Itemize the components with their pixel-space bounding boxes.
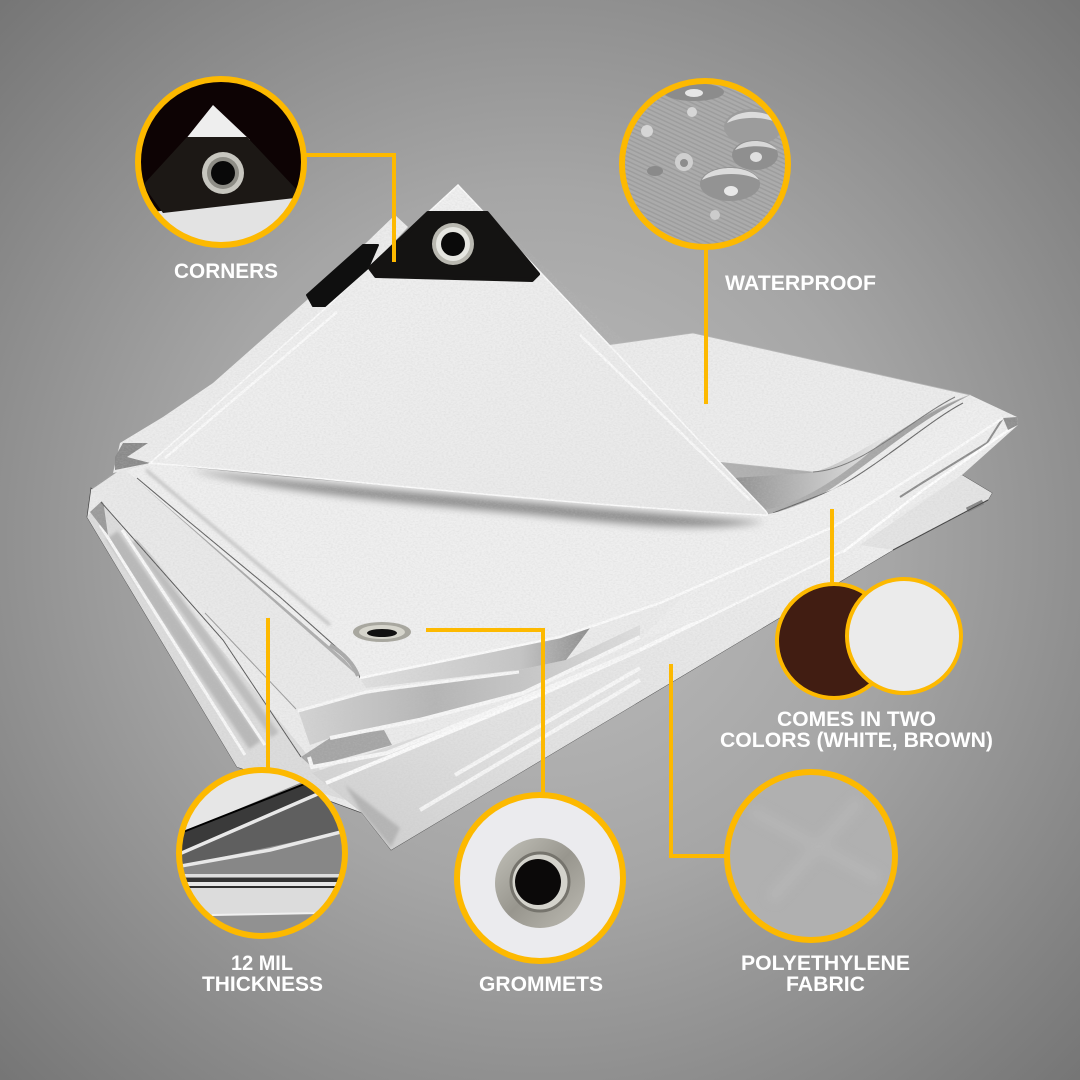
- label: polyethylene fabric: [741, 952, 910, 996]
- connector: thickness: [266, 618, 270, 768]
- folded triangle flap: [150, 185, 767, 515]
- label: two colors: COMES IN TWO: [777, 708, 936, 731]
- back corner black strip: [307, 245, 378, 306]
- swatch: white: [847, 579, 961, 693]
- right fold grooves: [773, 397, 1018, 552]
- front fold bands: [298, 625, 640, 767]
- circle: waterproof: [619, 78, 791, 250]
- label: thickness: THICKNESS: [202, 973, 323, 996]
- main top sheet: [125, 400, 1003, 678]
- wedge under fold: [733, 432, 893, 510]
- connector: grommets: [426, 630, 543, 793]
- label: corners: CORNERS: [174, 260, 278, 283]
- label: thickness: 12 MIL: [231, 952, 293, 975]
- connector: waterproof: [704, 247, 708, 404]
- circle: polyethylene fabric: [727, 772, 895, 940]
- connector lines: [268, 155, 832, 856]
- lower front face: [312, 515, 893, 850]
- circle: two colors: [777, 579, 961, 698]
- connector: polyethylene: [671, 664, 728, 856]
- second sheet: [91, 468, 366, 710]
- corner black patch: [370, 213, 538, 280]
- right back layer: [607, 333, 970, 472]
- edge grommet: [353, 622, 411, 642]
- connector: colors: [830, 509, 834, 585]
- circle: grommets: [457, 795, 623, 961]
- left folded pile: [87, 500, 345, 800]
- tarp base silhouette: [87, 475, 992, 850]
- folded white tarp: [80, 180, 1030, 860]
- tarp weave texture: [80, 180, 1030, 860]
- left crease: [115, 443, 150, 470]
- bottom right tab: [860, 475, 992, 550]
- connector: corners: [306, 155, 394, 262]
- corner grommet: [432, 223, 474, 265]
- label: polyethylene fabric: POLYETHYLENE: [741, 952, 910, 975]
- main sheet hem lines: [137, 418, 1003, 709]
- label: waterproof: WATERPROOF: [725, 272, 876, 295]
- circle: thickness: [176, 767, 348, 939]
- gap beneath top sheet: [360, 628, 590, 688]
- label: grommets: GROMMETS: [479, 973, 603, 996]
- swatch: brown: [777, 584, 891, 698]
- label: polyethylene fabric: FABRIC: [786, 973, 865, 996]
- circle: corners: [135, 76, 307, 248]
- flap hem: [165, 312, 750, 500]
- right folded strip: [640, 395, 1018, 640]
- label: two colors: [720, 708, 993, 752]
- shadow under fold: [190, 470, 765, 527]
- back corner layer: [113, 215, 408, 473]
- label: two colors: COLORS (WHITE, BROWN): [720, 729, 993, 752]
- label: thickness: [202, 952, 323, 996]
